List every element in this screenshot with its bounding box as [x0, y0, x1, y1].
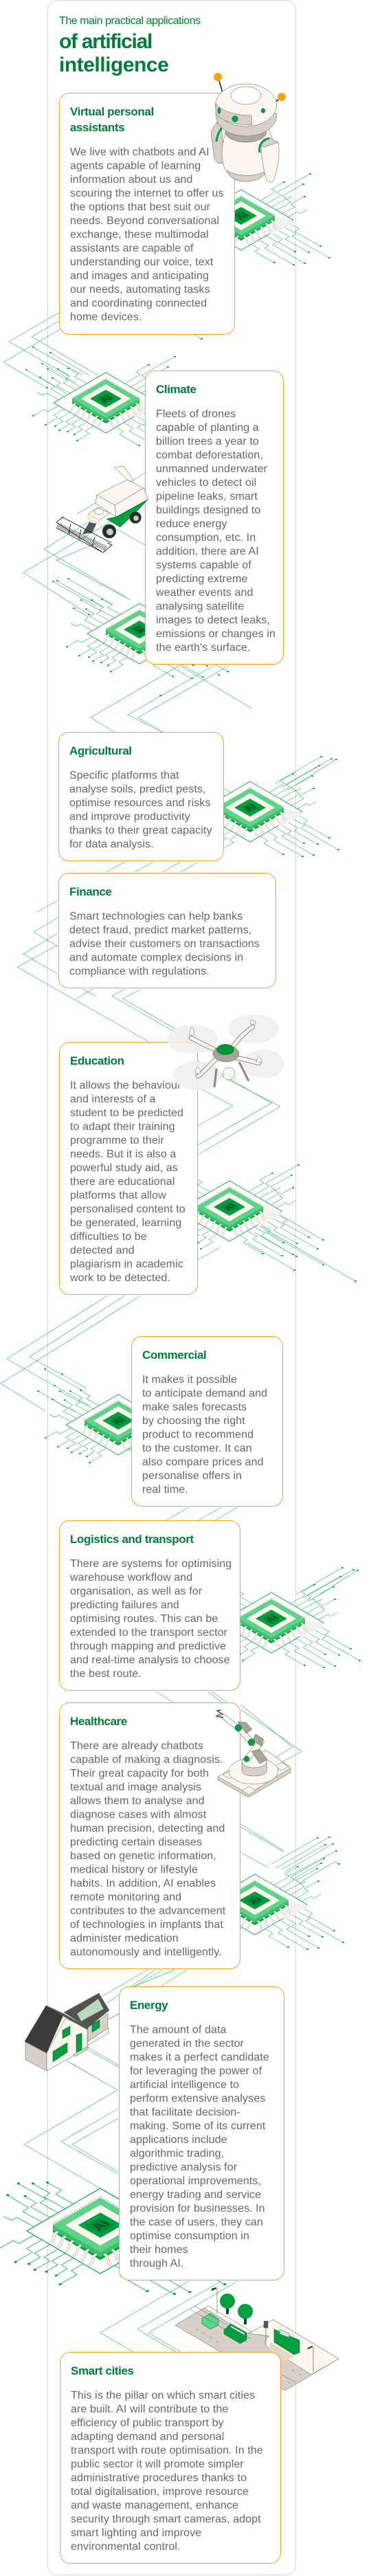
- card: climate: capable of planting a: [156, 422, 259, 434]
- card: climate: addition, there are AI: [156, 546, 259, 557]
- card: climate: pipeline leaks, smart: [156, 491, 258, 502]
- card: climate: Fleets of drones: [156, 408, 236, 420]
- card: healthcare: textual and image analysis: [70, 1781, 201, 1793]
- card: energy: Energy: [130, 1999, 168, 2012]
- card: logistics and transport: and real-time analysis to choose: [70, 1654, 230, 1666]
- card: smart cities: environmental control.: [71, 2541, 181, 2553]
- card: healthcare: diagnose cases with almost: [70, 1809, 206, 1821]
- card: climate: billion trees a year to: [156, 436, 259, 447]
- card: logistics and transport: warehouse workflow and: [70, 1572, 192, 1584]
- card: energy: operational improvements,: [130, 2175, 261, 2187]
- card: climate: [145, 370, 284, 665]
- card: agricultural: [58, 732, 224, 861]
- card: education: Education: [70, 1054, 124, 1067]
- card: healthcare: administer medication: [70, 1933, 179, 1944]
- card: agricultural: analyse soils, predict pests,: [69, 784, 206, 795]
- card: virtual personal assistants: needs. Beyond conversational: [70, 215, 219, 227]
- card: healthcare: autonomously and intelligently.: [70, 1946, 222, 1958]
- title: The main practical applications: [59, 15, 201, 27]
- card: smart cities: administrative procedures thanks to: [71, 2472, 247, 2484]
- card: logistics and transport: Logistics and transport: [70, 1533, 194, 1546]
- card: healthcare: There are already chatbots: [70, 1740, 203, 1752]
- card: education: It allows the behaviour: [70, 1080, 181, 1091]
- card: commercial: also compare prices and: [142, 1456, 264, 1468]
- icon: robotic arm: [216, 1710, 291, 1797]
- card: education: and interests of a: [70, 1093, 156, 1105]
- card: commercial: Commercial: [142, 1348, 206, 1362]
- card: logistics and transport: the best route.: [70, 1668, 142, 1680]
- card: education: difficulties to be: [70, 1231, 147, 1243]
- card: virtual personal assistants: home devices.: [70, 311, 142, 323]
- card: energy: through AI.: [130, 2258, 184, 2269]
- card: smart cities: and waste management, enhance: [71, 2500, 238, 2511]
- icon: robot: [211, 73, 286, 182]
- card: energy: optimise consumption in: [130, 2230, 249, 2242]
- card: smart cities: security through smart cameras, adopt: [71, 2513, 261, 2525]
- card: energy: artificial intelligence to: [130, 2079, 239, 2091]
- card: logistics and transport: organisation, as well as for: [70, 1586, 202, 1597]
- card: smart cities: smart lighting and improve: [71, 2527, 201, 2539]
- card: finance: and automate complex decisions in: [69, 952, 243, 964]
- chip: right of agricultural: AI: [241, 802, 259, 813]
- card: agricultural: Agricultural: [69, 744, 132, 757]
- card: virtual personal assistants: scouring the internet to offer us: [70, 188, 224, 199]
- card: energy: predictive analysis for: [130, 2162, 237, 2173]
- card: commercial: It makes it possible: [142, 1374, 237, 1386]
- card: virtual personal assistants: assistants are capable of: [70, 243, 194, 254]
- card: commercial: personalise offers in: [142, 1470, 242, 1482]
- chip: right of healthcare: [182, 1858, 344, 1949]
- card: commercial: make sales forecasts: [142, 1401, 247, 1413]
- card: climate: systems capable of: [156, 559, 251, 571]
- card: energy: The amount of data: [130, 2024, 227, 2036]
- card: agricultural: and improve productivity: [69, 811, 190, 823]
- card: commercial: [131, 1336, 283, 1507]
- chip: left of climate: [33, 357, 194, 447]
- card: healthcare: predicting certain diseases: [70, 1836, 202, 1848]
- card: climate: combat deforestation,: [156, 449, 263, 461]
- card: finance: advise their customers on transactions: [69, 938, 260, 950]
- card: healthcare: of technologies in implants that: [70, 1919, 223, 1931]
- card: education: platforms that allow: [70, 1190, 166, 1201]
- title: of artificial: [59, 30, 152, 53]
- card: commercial: by choosing the right: [142, 1415, 245, 1427]
- card: healthcare: contributes to the advancement: [70, 1905, 225, 1917]
- card: healthcare: medical history or lifestyle: [70, 1864, 198, 1876]
- card: healthcare: based on genetic information,: [70, 1850, 216, 1862]
- card: energy: perform extensive analyses: [130, 2093, 265, 2105]
- card: climate: weather events and: [156, 587, 253, 599]
- card: education: be generated, learning: [70, 1217, 181, 1229]
- card: climate: unmanned underwater: [156, 463, 267, 475]
- icon: drone: [167, 1014, 284, 1090]
- card: virtual personal assistants: understanding our voice, text: [70, 256, 213, 268]
- card: energy: generated in the sector: [130, 2038, 244, 2050]
- card: climate: consumption, etc. In: [156, 532, 256, 544]
- connecting circuit lines: [1, 313, 357, 2352]
- title: [59, 15, 201, 76]
- card: climate: analysing satellite: [156, 601, 244, 612]
- card: finance: compliance with regulations.: [69, 966, 210, 977]
- card: energy: makes it a perfect candidate: [130, 2052, 269, 2063]
- card: energy: that facilitate decision-: [130, 2107, 240, 2118]
- card: climate: Climate: [156, 383, 196, 396]
- card: education: to adapt their training: [70, 1121, 175, 1133]
- chip: left of commercial: [45, 1379, 207, 1469]
- card: energy: the case of users, they can: [130, 2217, 263, 2228]
- card: virtual personal assistants: information about us and: [70, 174, 193, 186]
- card: finance: Smart technologies can help banks: [69, 911, 243, 922]
- card: education: work to be detected.: [70, 1272, 170, 1284]
- card: agricultural: Specific platforms that: [69, 770, 179, 781]
- card: education: detected and: [70, 1245, 135, 1256]
- icon: harvester: [56, 466, 148, 553]
- card: finance: detect fraud, predict market patterns,: [69, 924, 251, 936]
- card: healthcare: capable of making a diagnosis.: [70, 1754, 223, 1766]
- card: agricultural: thanks to their great capacity: [69, 825, 212, 836]
- outer panel: [47, 0, 296, 2575]
- card: commercial: product to recommend: [142, 1429, 254, 1441]
- card: smart cities: [60, 2352, 281, 2564]
- card: smart cities: Smart cities: [71, 2364, 134, 2377]
- card: energy: provision for businesses. In: [130, 2203, 265, 2214]
- card: smart cities: transport with route optimisation. In the: [71, 2445, 263, 2456]
- card: agricultural: for data analysis.: [69, 839, 154, 850]
- card: logistics and transport: extended to the transport sector: [70, 1627, 227, 1639]
- card: climate: the earth's surface.: [156, 642, 251, 654]
- chip: left of energy, large: AI: [89, 2219, 113, 2232]
- chip: right of education: [157, 1165, 318, 1256]
- card: finance: [58, 873, 276, 988]
- card: virtual personal assistants: We live with chatbots and AI: [70, 146, 210, 158]
- card: finance: Finance: [69, 885, 111, 898]
- card: energy: making. Some of its current: [130, 2120, 265, 2132]
- chip: left of commercial: AI: [109, 1415, 127, 1426]
- card: virtual personal assistants: Virtual personal: [70, 105, 154, 118]
- card: healthcare: allows them to analyse and: [70, 1795, 205, 1807]
- card: energy: applications include: [130, 2134, 227, 2146]
- chip: left of climate: AI: [97, 393, 115, 404]
- card: logistics and transport: through mapping and predictive: [70, 1641, 226, 1652]
- chip: below tractor: IA: [131, 624, 148, 635]
- card: climate: reduce energy: [156, 518, 227, 530]
- card: smart cities: total digitalisation, improve resource: [71, 2486, 249, 2498]
- chip: right of healthcare: AI: [246, 1895, 264, 1906]
- card: virtual personal assistants: our needs, automating tasks: [70, 284, 210, 296]
- chip: right of logistics: AI: [262, 1613, 280, 1624]
- circuit line dots: [26, 339, 358, 1864]
- chip: right of education: AI: [221, 1201, 238, 1212]
- card: virtual personal assistants: assistants: [70, 121, 124, 134]
- card: education: there are educational: [70, 1176, 175, 1188]
- card: commercial: to anticipate demand and: [142, 1388, 267, 1399]
- chip: left of energy, large: [0, 2166, 225, 2294]
- card: climate: images to detect leaks,: [156, 614, 270, 626]
- card: virtual personal assistants: the options that best suit our: [70, 201, 210, 213]
- card: healthcare: Their great capacity for both: [70, 1768, 209, 1779]
- card: energy: for leveraging the power of: [130, 2065, 262, 2077]
- card: virtual personal assistants: [59, 93, 235, 335]
- card: smart cities: are built. AI will contribute to the: [71, 2403, 228, 2415]
- card: healthcare: remote monitoring and: [70, 1891, 181, 1903]
- card: education: plagiarism in academic: [70, 1258, 183, 1270]
- card: virtual personal assistants: and images and anticipating: [70, 270, 209, 282]
- card: climate: emissions or changes in: [156, 628, 276, 640]
- card: logistics and transport: There are systems for optimising: [70, 1558, 232, 1570]
- card: healthcare: habits. In addition, AI enables: [70, 1878, 216, 1889]
- card: education: programme to their: [70, 1135, 164, 1146]
- card: virtual personal assistants: agents capable of learning: [70, 160, 201, 172]
- card: climate: vehicles to detect oil: [156, 477, 256, 489]
- card: virtual personal assistants: and coordinating connected: [70, 298, 207, 309]
- card: energy: [119, 1986, 284, 2280]
- card: virtual personal assistants: exchange, these multimodal: [70, 229, 209, 241]
- card: logistics and transport: optimising routes. This can be: [70, 1613, 218, 1625]
- card: logistics and transport: [59, 1520, 240, 1691]
- chip: right of logistics: [199, 1577, 360, 1667]
- card: commercial: to the customer. It can: [142, 1443, 252, 1454]
- card: agricultural: optimise resources and risks: [69, 797, 211, 809]
- card: smart cities: adapting demand and personal: [71, 2431, 224, 2443]
- card: smart cities: This is the pillar on which smart cities: [71, 2390, 255, 2401]
- illustration: smart city: [175, 2287, 339, 2390]
- card: education: powerful study aid, as: [70, 1162, 178, 1174]
- card: education: personalised content to: [70, 1203, 186, 1215]
- card: healthcare: Healthcare: [70, 1715, 127, 1728]
- chip: right of agricultural: [177, 766, 339, 856]
- card: energy: energy trading and service: [130, 2189, 261, 2201]
- card: logistics and transport: predicting failures and: [70, 1599, 179, 1611]
- card: education: student to be predicted: [70, 1107, 183, 1119]
- card: commercial: real time.: [142, 1484, 188, 1496]
- card: climate: predicting extreme: [156, 573, 247, 585]
- card: education: needs. But it is also a: [70, 1148, 176, 1160]
- card: healthcare: [59, 1702, 240, 1969]
- card: education: [59, 1042, 198, 1295]
- card: smart cities: public sector it will promote simpler: [71, 2458, 244, 2470]
- title: intelligence: [59, 54, 168, 76]
- chip: below tractor: [67, 588, 228, 678]
- card: climate: buildings designed to: [156, 504, 260, 516]
- card: smart cities: efficiency of public transport by: [71, 2417, 224, 2429]
- card: healthcare: human precision, detecting and: [70, 1823, 225, 1834]
- card: energy: algorithmic trading,: [130, 2148, 224, 2159]
- card: energy: their homes: [130, 2244, 188, 2256]
- chip: top right: [168, 174, 330, 265]
- chip: top right: AI: [232, 210, 250, 221]
- illustration: house: [25, 1993, 109, 2071]
